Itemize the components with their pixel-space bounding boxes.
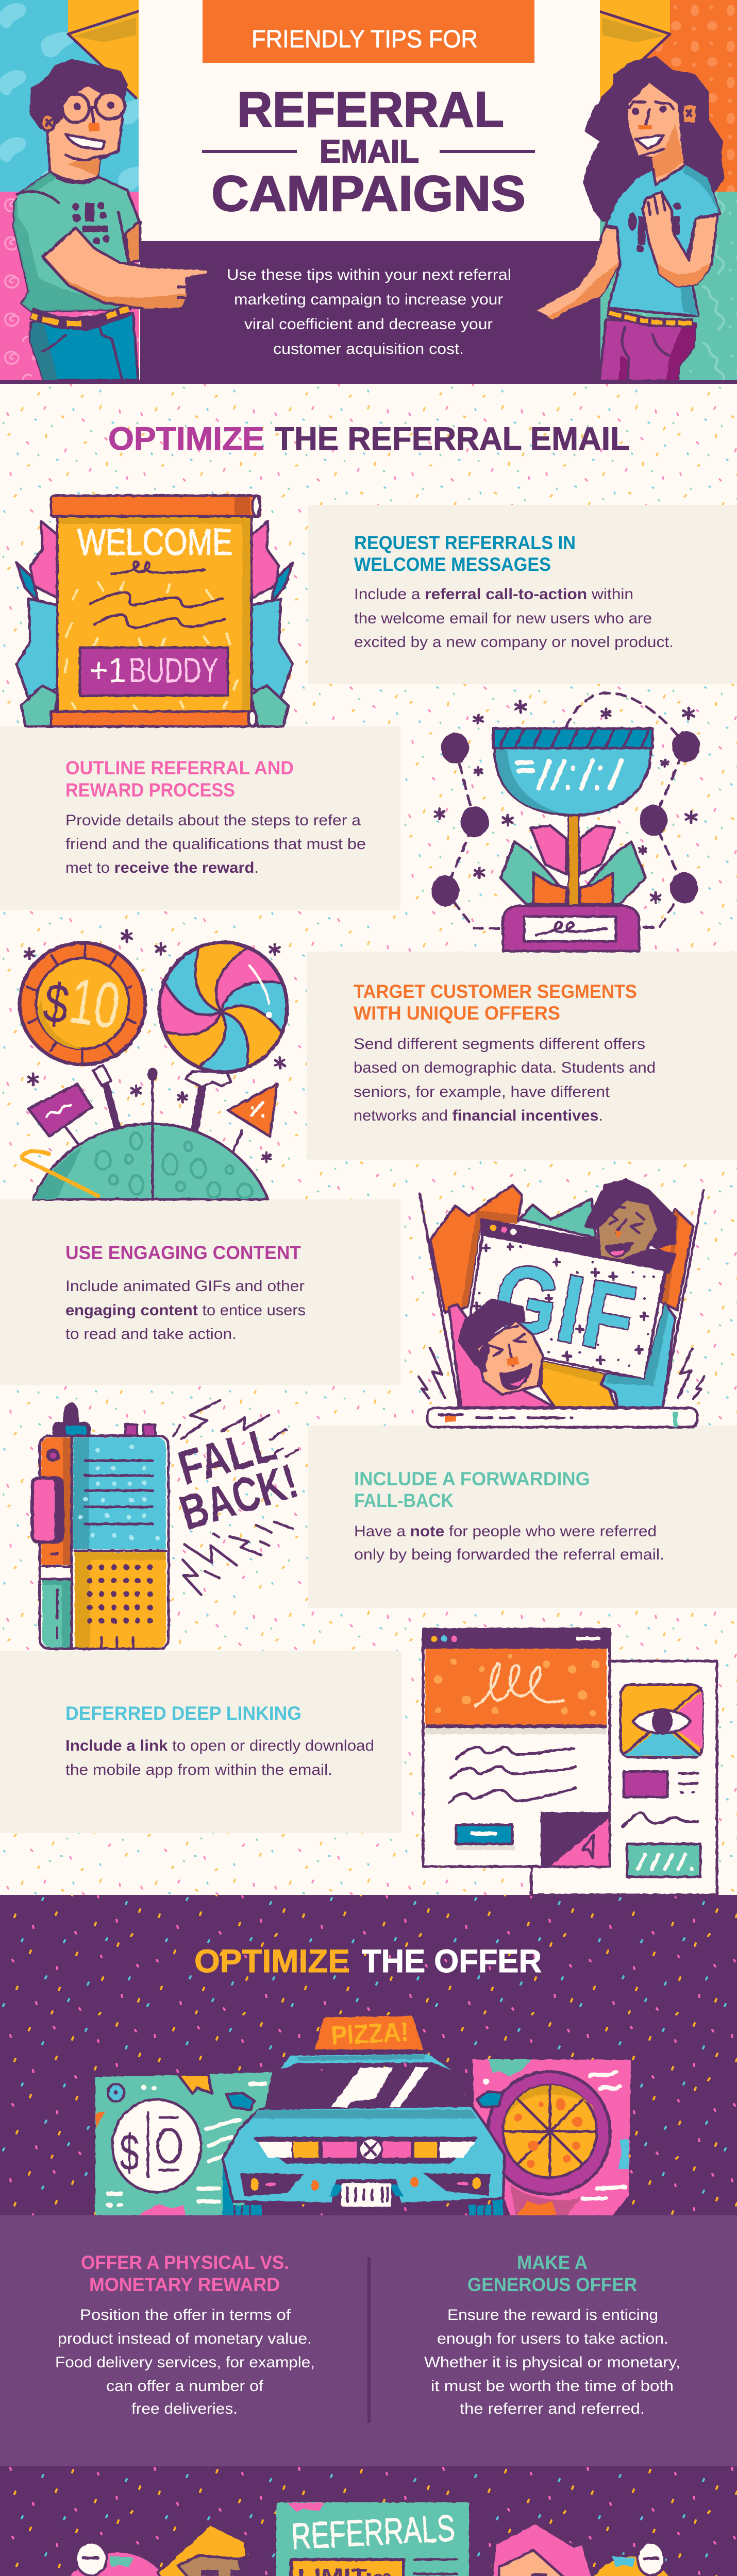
panel: use engaging content xyxy=(0,1199,400,1385)
panel: outline referral and reward process xyxy=(0,726,400,910)
body: the mobile app from within the email. xyxy=(65,1761,332,1778)
orange tag xyxy=(203,0,534,63)
body: Send different segments different offers xyxy=(354,1036,645,1053)
panel: offer a physical vs monetary reward / make a generous offer xyxy=(0,2215,737,2466)
divider xyxy=(367,2257,371,2423)
body: the welcome email for new users who are xyxy=(354,610,652,627)
section heading: optimize the referral email xyxy=(108,421,630,457)
heading: OUTLINE REFERRAL AND xyxy=(65,757,294,778)
column: offer a physical vs. monetary reward: MONETARY REWARD xyxy=(89,2274,280,2295)
body xyxy=(65,1278,306,1343)
body: met to receive the reward . xyxy=(65,859,259,876)
heading: INCLUDE A FORWARDING xyxy=(354,1468,590,1489)
heading: DEFERRED DEEP LINKING xyxy=(65,1703,301,1724)
intro paragraph: marketing campaign to increase your xyxy=(234,291,503,308)
body: engaging content to entice users xyxy=(65,1302,306,1319)
main title xyxy=(203,81,534,222)
green banknote: $ xyxy=(120,2124,139,2181)
referrals checklist xyxy=(276,2502,469,2576)
section heading: optimize the offer: OPTIMIZE xyxy=(194,1943,350,1979)
body: networks and financial incentives. xyxy=(354,1107,603,1124)
icon: walkie talkie with fall back text: BACK! xyxy=(174,1453,304,1540)
icon: coin, lollipop and planet: 10 xyxy=(65,965,124,1042)
body: only by being forwarded the referral email. xyxy=(354,1546,664,1563)
body xyxy=(354,586,674,651)
main title: CAMPAIGNS xyxy=(211,165,526,222)
section heading: optimize the referral email: THE REFERRAL EMAIL xyxy=(275,421,630,457)
heading xyxy=(354,1468,590,1511)
column: offer a physical vs. monetary reward: can offer a number of xyxy=(106,2378,264,2395)
heading: REWARD PROCESS xyxy=(65,779,235,801)
bottom edge line xyxy=(0,380,737,384)
column: offer a physical vs. monetary reward xyxy=(55,2252,315,2417)
icon: GIF browser with two laughing characters: GIF xyxy=(485,1243,645,1374)
section heading: optimize the offer xyxy=(194,1943,542,1979)
column: make a generous offer: enough for users to take action. xyxy=(437,2330,668,2347)
body xyxy=(354,1523,664,1563)
icon: browser window and app screens xyxy=(423,1629,717,1895)
icon: GIF browser with two laughing characters xyxy=(418,1180,705,1427)
intro paragraph: customer acquisition cost. xyxy=(273,341,464,358)
character: man pointing xyxy=(14,60,208,380)
column: make a generous offer: it must be worth the time of both xyxy=(431,2378,674,2395)
pink pizza note xyxy=(473,2059,631,2215)
character: woman xyxy=(534,58,723,381)
column: make a generous offer: Whether it is physical or monetary, xyxy=(424,2354,680,2371)
heading: WITH UNIQUE OFFERS xyxy=(354,1003,560,1024)
lollipop swirl xyxy=(159,942,287,1072)
icon: welcome poster: WELCOME xyxy=(77,522,232,563)
hero header xyxy=(0,0,737,384)
body: Include a link to open or directly download xyxy=(65,1737,374,1754)
woman with yellow coin xyxy=(471,2523,680,2576)
icon: pizza delivery car with money and pizza xyxy=(95,2016,631,2215)
purple intro panel xyxy=(140,241,600,381)
heading: USE ENGAGING CONTENT xyxy=(65,1242,301,1263)
referrals checklist: REFERRALS xyxy=(290,2508,456,2557)
body: Have a note for people who were referred xyxy=(354,1523,657,1540)
intro paragraph: viral coefficient and decrease your xyxy=(244,316,493,333)
section heading: optimize the referral email: OPTIMIZE xyxy=(108,421,264,457)
panel: request referrals in welcome messages xyxy=(308,505,737,684)
icon: welcome poster xyxy=(16,496,293,726)
column: make a generous offer: MAKE A xyxy=(517,2252,588,2273)
car body: PIZZA! xyxy=(330,2017,410,2051)
icon: walkie talkie with fall back text: FALL xyxy=(173,1416,281,1495)
main title: REFERRAL xyxy=(237,81,504,138)
icon: walkie talkie with fall back text xyxy=(32,1400,304,1649)
heading xyxy=(354,532,576,575)
icon: coin, lollipop and planet xyxy=(20,930,287,1199)
icon: trophy with dashed orbit xyxy=(431,693,700,951)
body: seniors, for example, have different xyxy=(354,1083,610,1100)
body: excited by a new company or novel product. xyxy=(354,634,674,651)
intro paragraph: Use these tips within your next referral xyxy=(227,266,511,283)
icon: welcome poster: +1 xyxy=(89,651,126,690)
icon: welcome poster: BUDDY xyxy=(129,651,219,690)
heading: FALL-BACK xyxy=(354,1490,454,1511)
cream title panel xyxy=(139,0,600,242)
heading xyxy=(65,757,294,801)
icon: coin, lollipop and planet: $ xyxy=(40,971,73,1036)
panel: target customer segments xyxy=(307,952,737,1160)
column: offer a physical vs. monetary reward: Position the offer in terms of xyxy=(80,2307,291,2324)
column: make a generous offer: the referrer and referred. xyxy=(460,2400,645,2417)
body xyxy=(65,1737,374,1778)
heading xyxy=(354,981,637,1024)
car body xyxy=(223,2016,505,2215)
body xyxy=(354,1036,656,1124)
icon: referrals checklist with two characters xyxy=(58,2502,680,2576)
body: friend and the qualifications that must be xyxy=(65,836,366,853)
body: Include animated GIFs and other xyxy=(65,1278,305,1295)
heading: WELCOME MESSAGES xyxy=(354,554,551,575)
panel: deferred deep linking xyxy=(0,1651,402,1833)
yellow ribbons xyxy=(68,0,670,99)
column: make a generous offer xyxy=(424,2252,680,2417)
kicker text: FRIENDLY TIPS FOR xyxy=(252,26,478,53)
intro paragraph xyxy=(227,266,511,358)
body: Provide details about the steps to refer a xyxy=(65,812,361,829)
man with pink coin xyxy=(58,2524,273,2576)
body xyxy=(65,812,366,876)
heading: REQUEST REFERRALS IN xyxy=(354,532,576,553)
panel: include a forwarding fall-back xyxy=(308,1426,737,1608)
green banknote xyxy=(95,2072,272,2215)
column: offer a physical vs. monetary reward: OFFER A PHYSICAL VS. xyxy=(81,2252,289,2273)
column: make a generous offer: GENEROUS OFFER xyxy=(467,2274,637,2295)
body: based on demographic data. Students and xyxy=(354,1059,656,1076)
column: offer a physical vs. monetary reward: free deliveries. xyxy=(131,2400,238,2417)
column: offer a physical vs. monetary reward: product instead of monetary value. xyxy=(58,2330,312,2347)
body: Include a referral call-to-action within xyxy=(354,586,633,603)
column: make a generous offer: Ensure the reward is enticing xyxy=(447,2307,658,2324)
body: to read and take action. xyxy=(65,1326,237,1343)
column: offer a physical vs. monetary reward: Food delivery services, for example, xyxy=(55,2354,315,2371)
heading: TARGET CUSTOMER SEGMENTS xyxy=(354,981,637,1002)
section heading: optimize the offer: THE OFFER xyxy=(362,1943,542,1979)
hero background colour blocks xyxy=(0,0,737,382)
main title: EMAIL xyxy=(320,134,419,170)
